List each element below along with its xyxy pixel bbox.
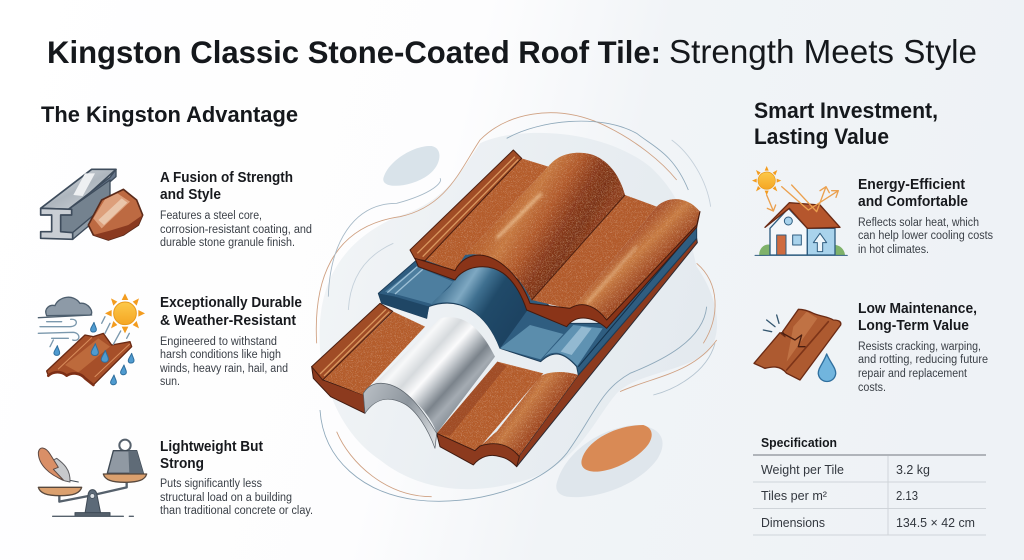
central illustration: layered roof tile	[312, 113, 717, 501]
row: tiles per square metre: 2.13	[896, 489, 918, 503]
description	[858, 217, 993, 256]
description: can help lower cooling costs	[858, 230, 993, 242]
heading	[160, 170, 293, 203]
icon: cracked tile and water drop	[754, 309, 841, 381]
heading	[160, 295, 302, 329]
heading: & Weather-Resistant	[160, 313, 296, 329]
heading: A Fusion of Strength	[160, 170, 293, 186]
item: lightweight but strong	[38, 439, 313, 517]
flowing contour lines	[316, 113, 717, 501]
description: in hot climates.	[858, 244, 929, 256]
description: than traditional concrete or clay.	[160, 505, 313, 517]
description: Engineered to withstand	[160, 336, 277, 348]
description: and rotting, reducing future	[858, 354, 988, 366]
heading: Energy-Efficient	[858, 177, 965, 193]
heading: and Style	[160, 187, 221, 203]
bottom terracotta layer	[312, 238, 697, 467]
description: corrosion-resistant coating, and	[160, 224, 312, 236]
heading: Smart Investment, Lasting Value: Smart Investment,	[754, 98, 938, 123]
heading: and Comfortable	[858, 194, 968, 210]
heading: Long-Term Value	[858, 318, 969, 334]
specification table	[753, 436, 986, 535]
description: durable stone granule finish.	[160, 237, 295, 249]
row: weight per tile	[761, 463, 930, 477]
description: costs.	[858, 382, 886, 394]
row: tiles per square metre: Tiles per m²	[761, 489, 827, 503]
description: Puts significantly less	[160, 478, 262, 490]
icon: house reflecting sun	[752, 166, 847, 256]
heading: Smart Investment, Lasting Value	[754, 98, 938, 149]
heading	[160, 439, 263, 472]
heading: The Kingston Advantage: The Kingston Advantage	[41, 102, 298, 127]
row: weight per tile: 3.2 kg	[896, 463, 930, 477]
panel: right value	[752, 166, 993, 535]
item: strength and style	[41, 169, 312, 249]
row: tiles per square metre	[761, 489, 918, 503]
title	[47, 33, 977, 70]
row: dimensions: Dimensions	[761, 516, 825, 530]
row: weight per tile: Weight per Tile	[761, 463, 844, 477]
heading: Strong	[160, 456, 204, 472]
title: Strength Meets Style	[669, 33, 977, 70]
heading	[858, 301, 977, 334]
panel: left advantages	[38, 169, 313, 517]
description: structural load on a building	[160, 492, 292, 504]
description: Features a steel core,	[160, 210, 262, 222]
item: durable and weather-resistant	[38, 293, 302, 388]
description: sun.	[160, 376, 180, 388]
description	[159, 336, 288, 388]
icon: steel beam and stone	[41, 169, 143, 240]
title: Kingston Classic Stone-Coated Roof Tile:	[47, 34, 661, 70]
item: low maintenance	[754, 301, 988, 394]
item: energy-efficient	[752, 166, 993, 256]
icon: tile under storm and sun	[38, 293, 145, 385]
description: Resists cracking, warping,	[858, 341, 981, 353]
galvanised steel core layer	[363, 317, 495, 448]
description	[160, 210, 312, 249]
top terracotta stone-coated layer	[410, 150, 700, 328]
heading: Low Maintenance,	[858, 301, 977, 317]
description: harsh conditions like high	[160, 349, 281, 361]
description: winds, heavy rain, hail, and	[159, 363, 288, 375]
icon: feather and weight on scale	[38, 440, 147, 516]
heading: Exceptionally Durable	[160, 295, 302, 311]
row: dimensions	[761, 516, 975, 530]
description: repair and replacement	[858, 368, 968, 380]
row: dimensions: 134.5 × 42 cm	[896, 516, 975, 530]
description: Reflects solar heat, which	[858, 217, 979, 229]
blue protective coating layer	[378, 225, 697, 375]
description	[160, 478, 313, 517]
table header: Specification	[761, 436, 837, 450]
heading: Lightweight But	[160, 439, 263, 455]
heading	[858, 177, 968, 210]
background blobs	[320, 133, 717, 497]
heading: Smart Investment, Lasting Value: Lasting Value	[754, 124, 889, 149]
description	[858, 341, 988, 394]
